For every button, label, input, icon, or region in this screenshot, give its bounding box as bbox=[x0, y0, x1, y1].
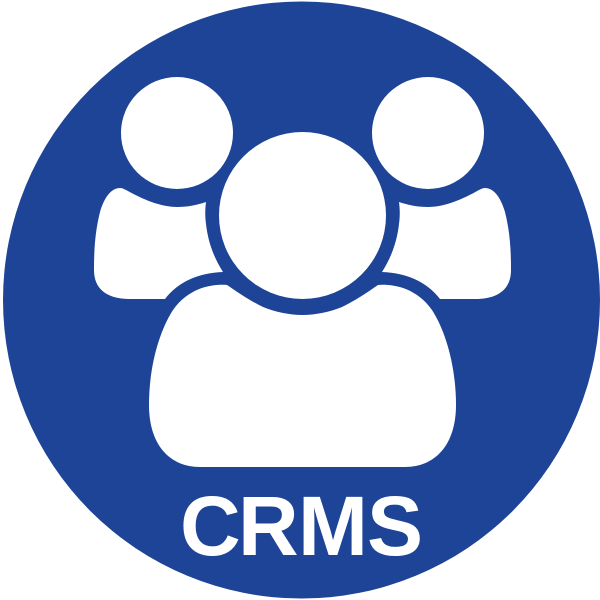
icon: right person bbox=[372, 77, 511, 299]
label: CRMS: CRMS bbox=[180, 479, 423, 573]
icon: left person bbox=[94, 77, 233, 299]
icon: center person bbox=[149, 132, 456, 467]
icon: group of people bbox=[94, 77, 511, 467]
